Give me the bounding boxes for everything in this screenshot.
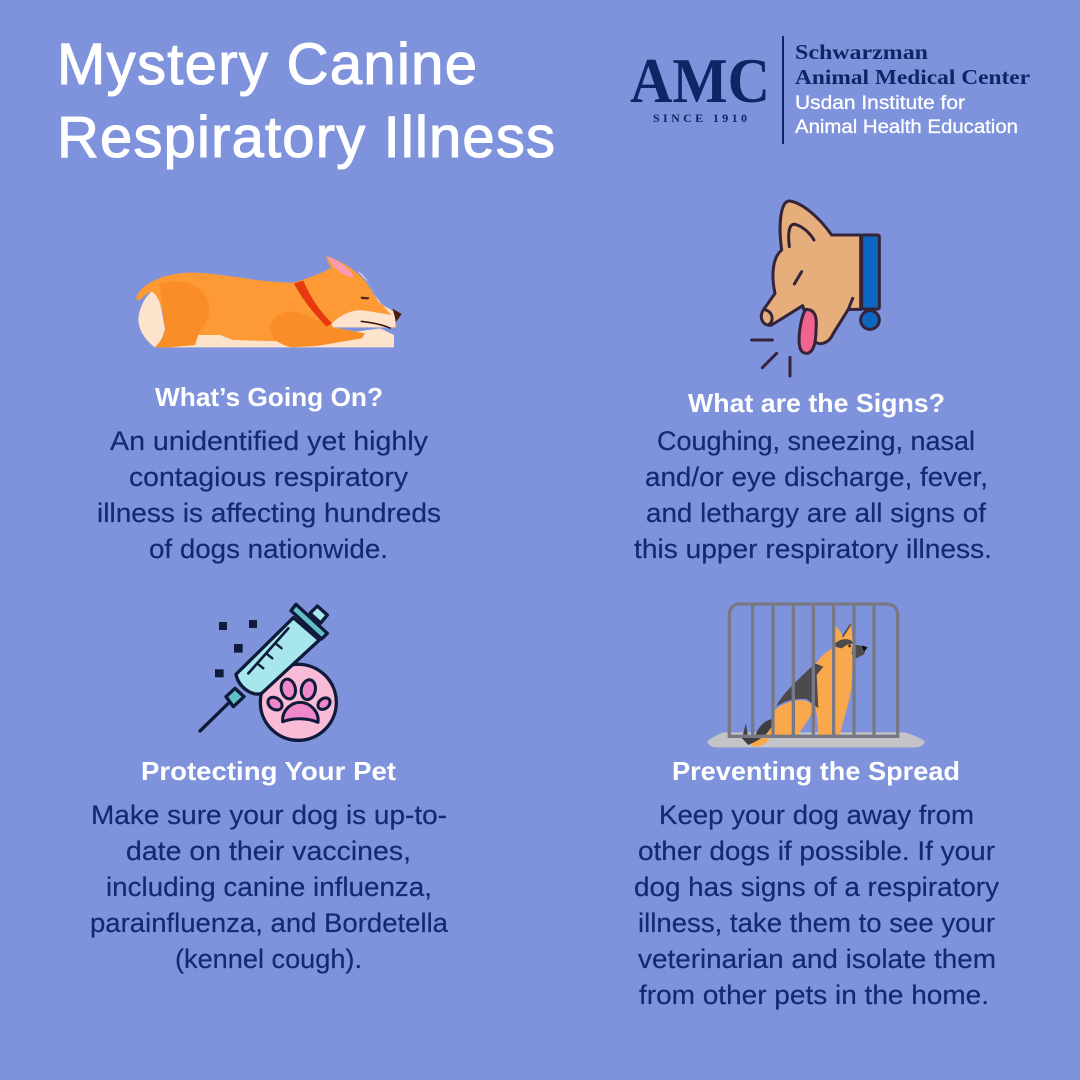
- icon: syringe with paw: [200, 604, 336, 740]
- text block: Protecting Your Pet: (kennel cough).: [175, 944, 362, 974]
- heading: Preventing the Spread: Preventing the Spread: [672, 756, 960, 786]
- logo: AMC Schwarzman Animal Medical Center: [630, 36, 1030, 144]
- text block: Preventing the Spread: other dogs if possible. If your: [638, 836, 995, 866]
- text block: What are the Signs: Coughing, sneezing, nasal: [657, 426, 975, 456]
- text block: Protecting Your Pet: including canine influenza,: [106, 872, 432, 902]
- logo: AMC Schwarzman Animal Medical Center: AMC: [630, 46, 770, 116]
- text block: What's Going On: [97, 426, 441, 564]
- icon: coughing dog head: [752, 201, 879, 376]
- logo: AMC Schwarzman Animal Medical Center: Animal Health Education: [795, 117, 1018, 138]
- title: Respiratory Illness: [57, 105, 555, 170]
- icon: sleeping corgi: [136, 256, 402, 347]
- title: Mystery Canine: [57, 32, 477, 97]
- text block: What are the Signs: [634, 426, 992, 564]
- title: [57, 32, 555, 170]
- icon: German shepherd in cage: [707, 604, 925, 747]
- text block: Protecting Your Pet: Make sure your dog is up-to-: [91, 800, 447, 830]
- text block: Preventing the Spread: from other pets in the home.: [639, 980, 989, 1010]
- text block: What's Going On: illness is affecting hundreds: [97, 498, 441, 528]
- text block: What are the Signs: and/or eye discharge, fever,: [645, 462, 988, 492]
- text block: Preventing the Spread: [634, 800, 1000, 1010]
- logo: AMC Schwarzman Animal Medical Center: Usdan Institute for: [795, 93, 966, 114]
- heading: Protecting Your Pet: Protecting Your Pet: [141, 756, 396, 786]
- text block: What's Going On: contagious respiratory: [129, 462, 409, 492]
- text block: Preventing the Spread: dog has signs of a respiratory: [634, 872, 1000, 902]
- text block: What's Going On: of dogs nationwide.: [149, 534, 388, 564]
- text block: Preventing the Spread: Keep your dog away from: [659, 800, 974, 830]
- heading: What's Going On?: What’s Going On?: [155, 382, 383, 412]
- text block: Preventing the Spread: illness, take them to see your: [638, 908, 995, 938]
- text block: Protecting Your Pet: [90, 800, 449, 974]
- heading: What are the Signs?: What are the Signs?: [688, 388, 945, 418]
- logo: AMC Schwarzman Animal Medical Center: Schwarzman: [795, 40, 928, 64]
- text block: Protecting Your Pet: date on their vaccines,: [126, 836, 411, 866]
- text block: Protecting Your Pet: parainfluenza, and Bordetella: [90, 908, 449, 938]
- logo: AMC Schwarzman Animal Medical Center: SINCE 1910: [653, 111, 747, 125]
- text block: What are the Signs: this upper respiratory illness.: [634, 534, 992, 564]
- text block: What are the Signs: and lethargy are all signs of: [646, 498, 987, 528]
- text block: What's Going On: An unidentified yet highly: [110, 426, 429, 456]
- logo: AMC Schwarzman Animal Medical Center: Animal Medical Center: [795, 65, 1030, 89]
- text block: Preventing the Spread: veterinarian and isolate them: [638, 944, 996, 974]
